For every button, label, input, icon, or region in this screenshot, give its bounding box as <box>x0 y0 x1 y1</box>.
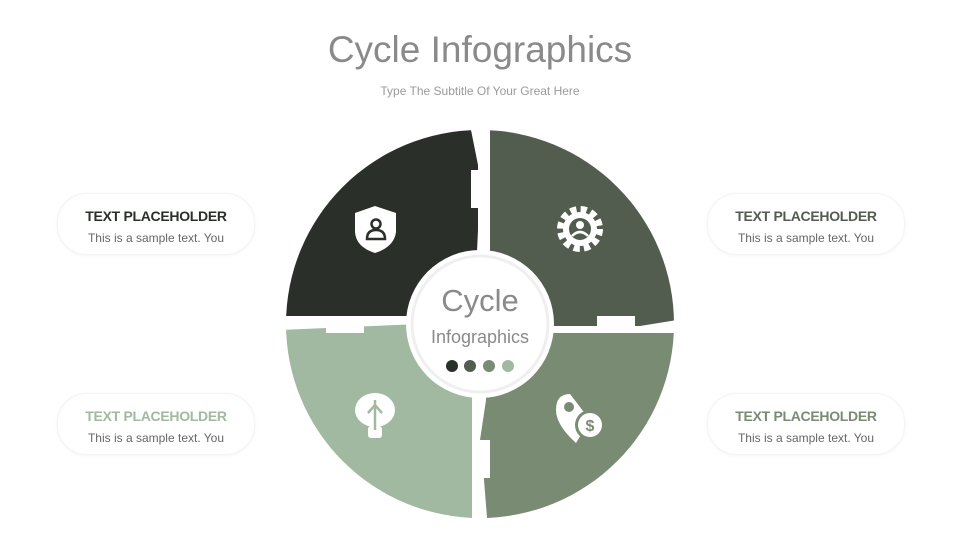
card: top left: This is a sample text. You <box>88 231 224 245</box>
card: top right <box>707 193 905 255</box>
icon: shield user <box>355 206 396 253</box>
card: top right: This is a sample text. You <box>738 231 874 245</box>
segment: bottom left <box>280 324 472 530</box>
icon: location dollar <box>556 394 605 443</box>
card: bottom right: This is a sample text. You <box>738 431 874 445</box>
segment: bottom right <box>480 333 674 518</box>
center circle <box>406 250 554 398</box>
card: top left <box>57 193 255 255</box>
card: top right: TEXT PLACEHOLDER <box>735 208 877 224</box>
card: bottom right: TEXT PLACEHOLDER <box>735 408 877 424</box>
segment: top left <box>280 120 478 316</box>
center circle: Infographics <box>431 327 529 347</box>
icon: brain <box>355 393 395 438</box>
card: bottom left <box>57 393 255 455</box>
card: bottom left: TEXT PLACEHOLDER <box>85 408 227 424</box>
icon: location dollar: $ <box>586 418 595 435</box>
card: top left: TEXT PLACEHOLDER <box>85 208 227 224</box>
segment: top right <box>490 130 674 326</box>
card: bottom left: This is a sample text. You <box>88 431 224 445</box>
subtitle: Type The Subtitle Of Your Great Here <box>380 84 580 98</box>
title: Cycle Infographics <box>328 29 632 70</box>
cycle chart <box>286 130 674 518</box>
icon: gear user <box>561 210 599 248</box>
card: bottom right <box>707 393 905 455</box>
center circle: Cycle <box>441 283 519 318</box>
